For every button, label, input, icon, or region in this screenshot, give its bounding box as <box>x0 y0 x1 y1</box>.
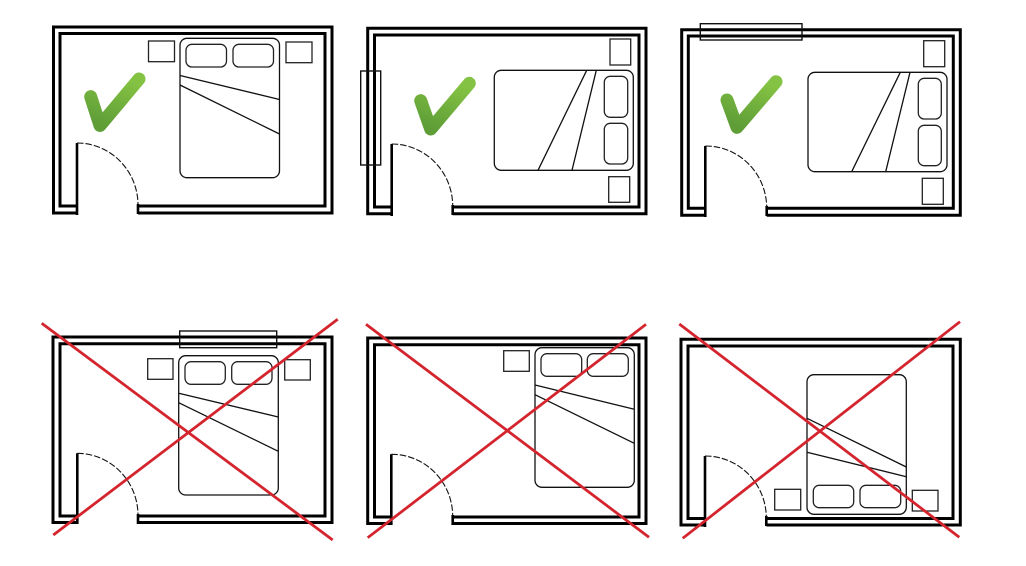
panel: good layout 1, bed against wall opposite window-free side <box>54 27 332 215</box>
bed <box>494 70 633 170</box>
door swing <box>391 454 453 516</box>
door swing <box>705 146 767 207</box>
panel: bad layout 1, headboard under window <box>42 319 338 540</box>
icon: green check mark <box>727 82 776 127</box>
nightstands <box>609 39 631 202</box>
icon: green check mark <box>91 79 139 126</box>
window <box>361 71 381 165</box>
door swing <box>705 456 766 517</box>
nightstands <box>922 41 945 204</box>
panel: bad layout 3, headboard on door wall <box>679 322 960 538</box>
nightstands <box>775 489 938 511</box>
panel: good layout 3, window on top wall <box>682 24 960 217</box>
room walls <box>368 338 646 525</box>
bed <box>179 356 278 495</box>
room walls <box>53 337 332 524</box>
icon: red cross <box>366 324 649 538</box>
room walls <box>368 28 646 216</box>
door swing <box>77 143 138 205</box>
icon: red cross <box>679 322 960 538</box>
door swing <box>77 453 138 515</box>
room walls <box>682 30 960 217</box>
room walls <box>54 27 332 215</box>
bed <box>807 375 906 514</box>
panel: bad layout 2, bed in the corner <box>366 324 649 538</box>
window <box>180 331 277 348</box>
nightstands <box>148 359 310 380</box>
icon: red cross <box>42 319 338 540</box>
icon: green check mark <box>421 83 469 129</box>
room walls <box>681 339 960 527</box>
nightstands <box>148 41 312 63</box>
bed <box>808 72 947 172</box>
door swing <box>392 144 453 206</box>
bed <box>535 348 634 487</box>
nightstand <box>504 351 529 371</box>
window <box>700 24 802 40</box>
bed <box>180 38 280 178</box>
panel: good layout 2, window on left wall <box>361 28 646 216</box>
